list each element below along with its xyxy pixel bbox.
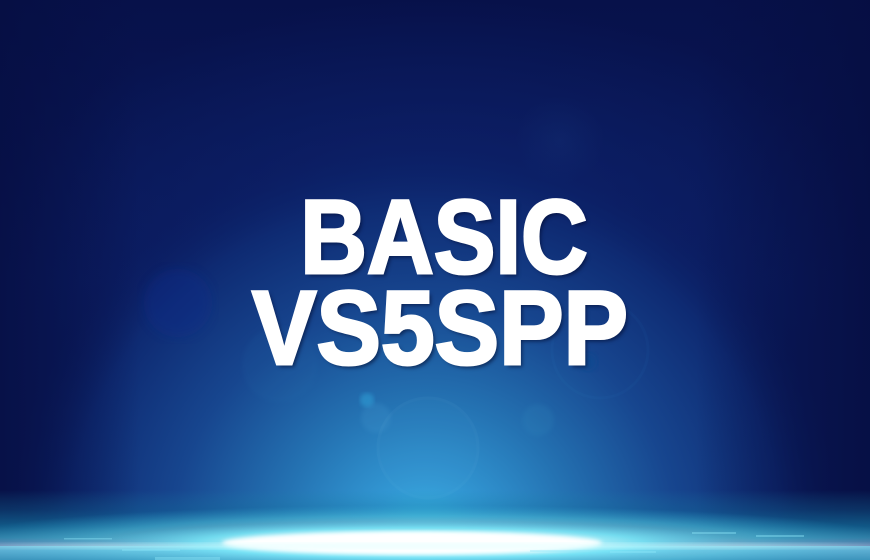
horizon floor	[0, 546, 870, 560]
light streaks	[64, 532, 804, 560]
title line 2: VS5SPP	[252, 270, 628, 387]
title line 1: BASIC	[300, 179, 588, 296]
horizon light	[0, 505, 870, 560]
bokeh circles	[144, 95, 648, 498]
title	[250, 179, 629, 387]
